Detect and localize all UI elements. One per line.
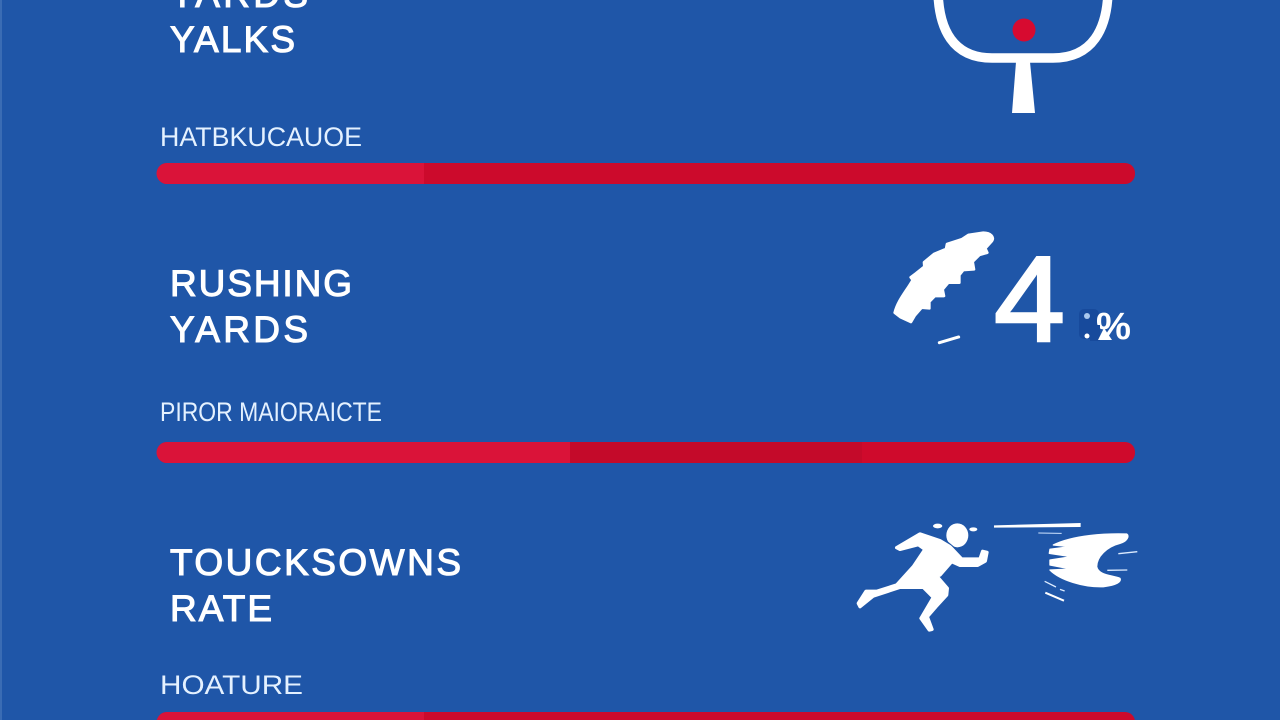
icon: sprinting runner — [858, 523, 987, 630]
panel: touchdowns rate — [156, 523, 1137, 720]
heading: rushing yards: RUSHING — [170, 263, 352, 304]
heading: rushing yards — [170, 263, 352, 350]
heading: touchdowns rate: RATE — [170, 588, 272, 629]
sublabel: PIROR MAIORAICTE — [160, 397, 382, 427]
heading: yards yalks: YALKS — [170, 19, 295, 60]
sublabel: HATBKUCAUOE — [160, 122, 362, 152]
stat: big number 4: 4 — [994, 231, 1065, 367]
progress bar — [156, 712, 1135, 720]
panel: yards (cropped top) — [156, 0, 1135, 184]
heading: touchdowns rate: TOUCKSOWNS — [170, 542, 461, 583]
stat: percent sign: % — [1096, 306, 1131, 348]
heading: touchdowns rate — [170, 542, 461, 629]
stat: percent sign — [1079, 306, 1131, 348]
progress bar — [156, 442, 1135, 463]
icon: racket with red dot — [938, 0, 1108, 113]
sublabel: HOATURE — [160, 670, 303, 700]
icon: football — [895, 233, 993, 343]
icon: speed wing with motion lines — [994, 523, 1137, 601]
panel: rushing yards — [156, 231, 1135, 463]
progress bar — [156, 163, 1135, 184]
heading: yards yalks — [170, 0, 308, 60]
heading: rushing yards: YARDS — [170, 309, 308, 350]
